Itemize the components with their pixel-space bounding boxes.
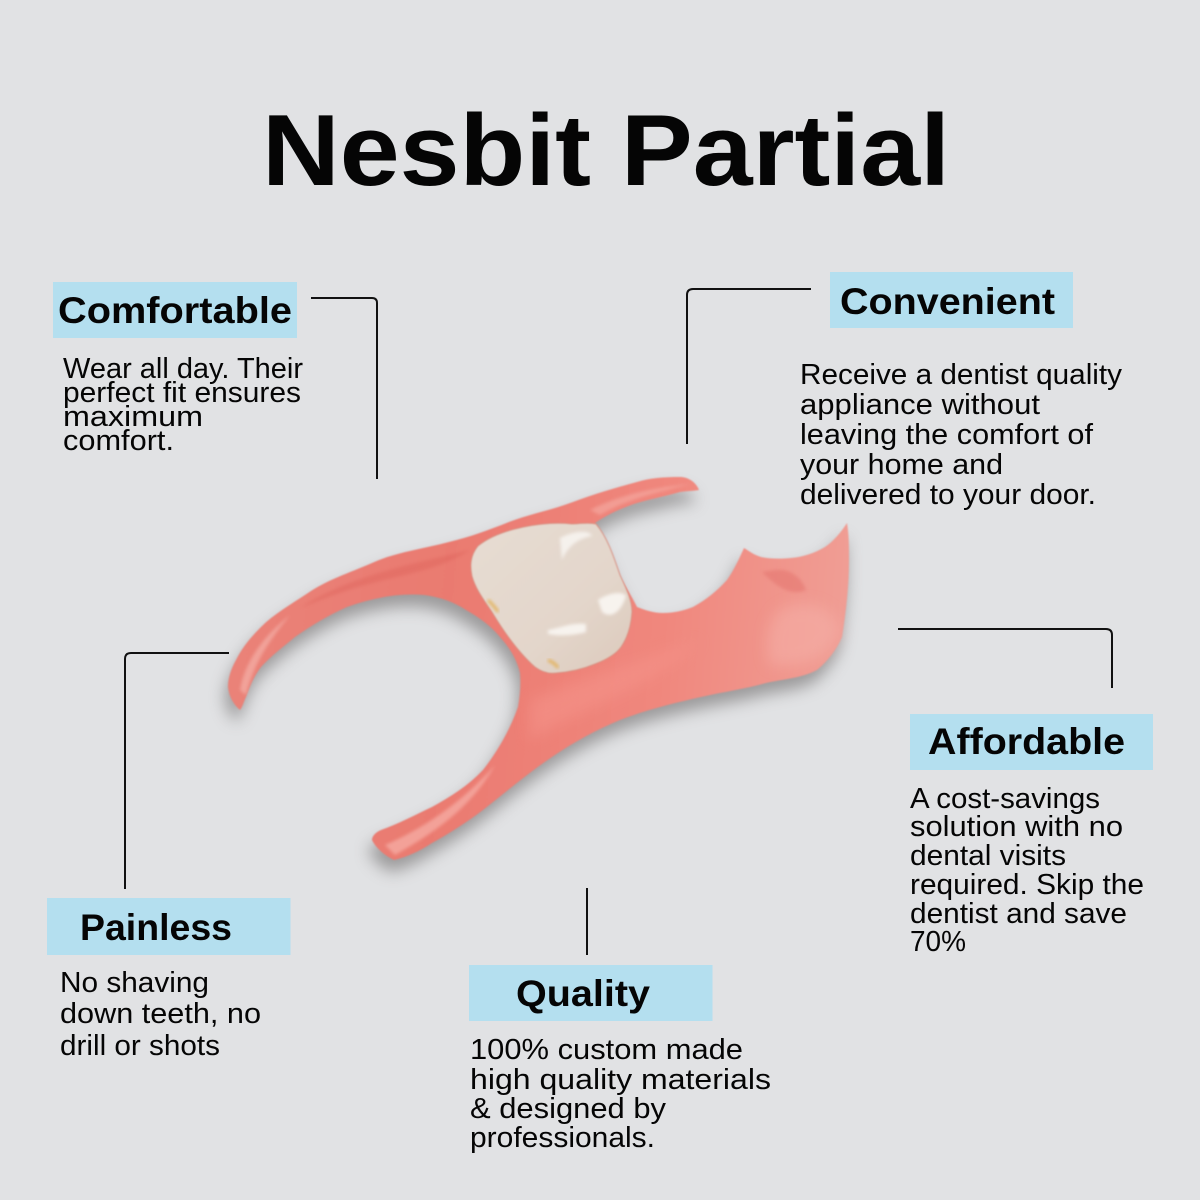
text: Comfortable description: comfort. — [63, 425, 174, 457]
text: Quality description: professionals. — [470, 1122, 655, 1154]
tooth — [471, 523, 632, 673]
panel: Painless — [47, 898, 290, 1062]
text: Affordable description — [910, 783, 1144, 958]
illustration: Nesbit partial denture — [225, 477, 849, 872]
text: Convenient description: Receive a dentist quality — [800, 359, 1123, 391]
text: Comfortable description — [63, 353, 304, 457]
text: Affordable description: A cost-savings — [910, 783, 1100, 815]
text: Painless description: No shaving — [60, 967, 209, 999]
text: Comfortable description: Wear all day. Their — [63, 353, 304, 385]
text: Comfortable description: maximum — [63, 401, 203, 433]
text: Affordable description: dentist and save — [910, 898, 1127, 930]
connector: Convenient — [687, 289, 811, 444]
text: Convenient description: leaving the comfort of — [800, 419, 1093, 451]
text: Painless description: down teeth, no — [60, 998, 261, 1030]
text: Comfortable description: perfect fit ensures — [63, 377, 301, 409]
heading: Comfortable: Comfortable — [58, 290, 292, 331]
text: Quality description: high quality materials — [470, 1064, 771, 1096]
connector: Affordable — [898, 629, 1112, 688]
title: Nesbit Partial — [262, 95, 950, 207]
text: Affordable description: dental visits — [910, 840, 1066, 872]
heading: Painless — [47, 898, 290, 955]
text: Quality description: 100% custom made — [470, 1034, 743, 1066]
connector: Painless — [125, 653, 229, 889]
text: Quality description — [470, 1034, 771, 1154]
text: Affordable description: 70% — [910, 926, 966, 958]
text: Painless description — [60, 967, 261, 1062]
connector: Comfortable — [311, 298, 377, 479]
panel: Quality — [469, 965, 771, 1154]
heading: Convenient: Convenient — [840, 281, 1055, 322]
text: Quality description: & designed by — [470, 1093, 667, 1125]
heading: Affordable: Affordable — [928, 721, 1125, 762]
text: Painless description: drill or shots — [60, 1030, 220, 1062]
panel: Affordable — [910, 714, 1153, 958]
text: Convenient description: appliance without — [800, 389, 1040, 421]
heading: Comfortable — [53, 282, 297, 338]
panel: Comfortable — [53, 282, 304, 457]
text: Convenient description: delivered to your door. — [800, 479, 1096, 511]
text: Convenient description — [800, 359, 1123, 511]
pink gum base — [228, 477, 849, 860]
heading: Affordable — [910, 714, 1153, 770]
heading: Convenient — [830, 272, 1073, 328]
heading: Painless: Painless — [80, 907, 232, 948]
heading: Quality: Quality — [516, 973, 650, 1014]
connector: Quality — [586, 888, 588, 955]
panel: Convenient — [800, 272, 1123, 511]
text: Convenient description: your home and — [800, 449, 1003, 481]
soft shadow under appliance — [225, 489, 846, 872]
heading: Quality — [469, 965, 712, 1021]
text: Affordable description: required. Skip the — [910, 869, 1144, 901]
gum highlights and shading — [240, 484, 840, 855]
text: Affordable description: solution with no — [910, 811, 1123, 843]
